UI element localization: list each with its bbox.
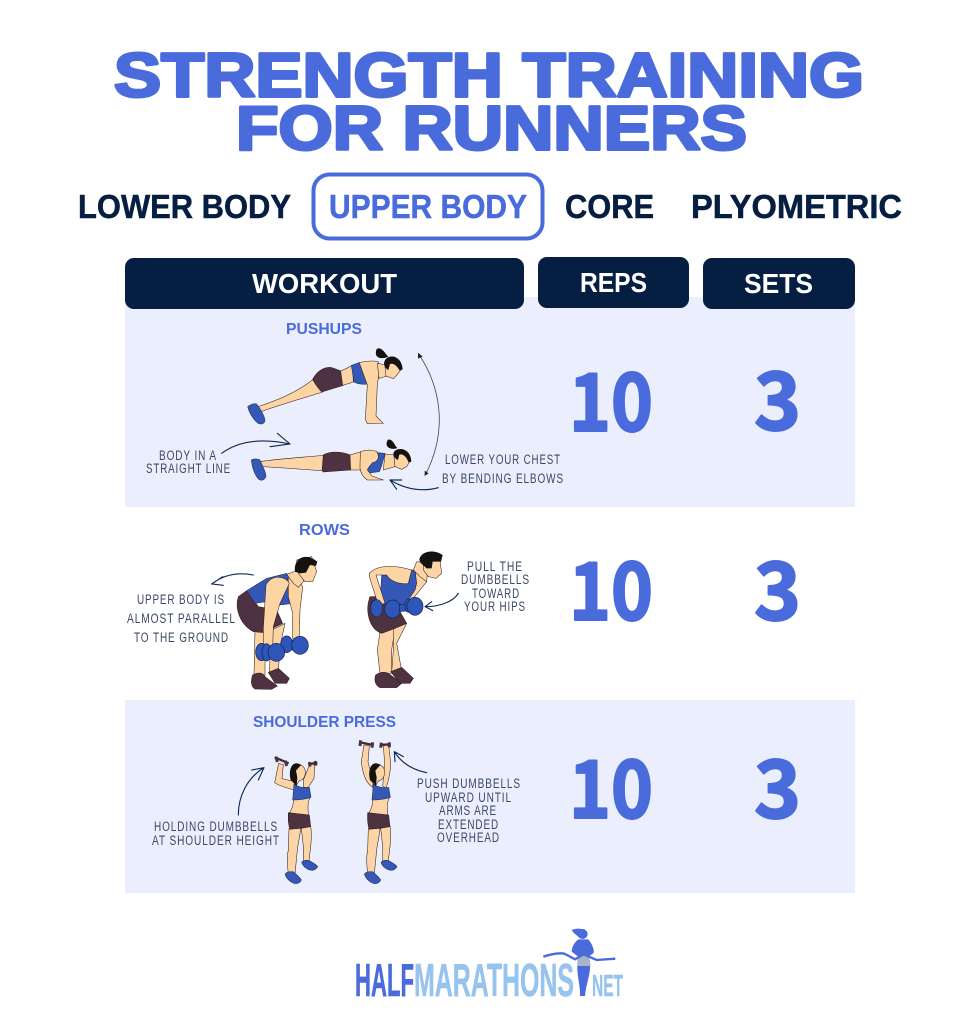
title: FOR RUNNERS	[236, 94, 747, 164]
callout: upper body is almost parallel: ALMOST PARALLEL	[127, 611, 236, 626]
callout: push dumbbells: PUSH DUMBBELLS	[417, 776, 521, 791]
logo text: net: NET	[592, 968, 623, 1003]
arrow: push upward	[394, 752, 427, 773]
illustration: pushups	[248, 348, 411, 480]
panel: shoulder press	[152, 714, 801, 884]
title: STRENGTH TRAINING	[114, 42, 864, 110]
callout: push dumbbells: ARMS ARE	[439, 803, 497, 818]
callout: body in a straight line	[146, 448, 231, 476]
reps value: pushups: 10	[569, 339, 653, 455]
logo: halfmarathons.net: HALF	[355, 954, 414, 1006]
callout: push dumbbells: UPWARD UNTIL	[425, 790, 512, 805]
callout: push dumbbells	[417, 776, 521, 845]
logo: halfmarathons.net	[355, 929, 623, 1006]
sets value: rows: 3	[754, 528, 801, 644]
heading: rows: ROWS	[299, 522, 350, 539]
callout: pull the dumbbells: YOUR HIPS	[464, 599, 526, 614]
callout: lower your chest: BY BENDING ELBOWS	[442, 471, 564, 486]
callout: holding dumbbells: AT SHOULDER HEIGHT	[152, 833, 280, 848]
illustration: shoulder press	[275, 740, 397, 884]
arrow: pull toward hips	[425, 593, 458, 611]
tab: upper body: UPPER BODY	[329, 188, 527, 225]
table header: workout	[125, 258, 524, 309]
callout: upper body is almost parallel	[127, 592, 236, 645]
arrow: shoulder height	[238, 768, 264, 815]
reps value: shoulder press: 10	[569, 726, 653, 842]
panel: pushups row background	[125, 297, 855, 507]
sets value: pushups: 3	[754, 338, 801, 454]
callout: upper body is almost parallel: TO THE GROUND	[134, 630, 229, 645]
title	[114, 42, 864, 164]
logo icon: runner with finish tape	[543, 929, 615, 996]
callout: pull the dumbbells	[461, 559, 530, 614]
panel: pushups	[146, 321, 801, 490]
reps value: rows: 10	[569, 528, 653, 644]
table header: reps: REPS	[580, 267, 647, 298]
callout: pull the dumbbells: TOWARD	[472, 586, 520, 601]
callout: push dumbbells: EXTENDED	[438, 817, 499, 832]
callout: body in a straight line: BODY IN A	[159, 448, 217, 463]
arrow: lower your chest	[390, 480, 438, 490]
tab: plyometric: PLYOMETRIC	[691, 188, 902, 225]
illustration: rows, dumbbells at the floor	[237, 557, 317, 689]
tab: core: CORE	[565, 188, 654, 225]
table header: sets: SETS	[744, 268, 813, 299]
table header: workout: WORKOUT	[252, 268, 397, 299]
logo text: marathons: MARATHONS	[414, 954, 574, 1006]
panel: shoulder press row background	[125, 700, 855, 893]
table header: reps	[538, 257, 689, 308]
heading: pushups: PUSHUPS	[286, 321, 362, 338]
callout: holding dumbbells	[152, 819, 280, 848]
tab: lower body: LOWER BODY	[78, 188, 291, 225]
sets value: shoulder press: 3	[754, 726, 801, 842]
callout: upper body is almost parallel: UPPER BODY IS	[137, 592, 225, 607]
callout: lower your chest: LOWER YOUR CHEST	[445, 452, 561, 467]
table header: sets	[703, 258, 855, 309]
callout: lower your chest	[442, 452, 564, 486]
tab: upper body active outline	[314, 174, 542, 238]
category navigation	[78, 174, 902, 238]
arrow: upper body parallel	[212, 574, 253, 585]
callout: holding dumbbells: HOLDING DUMBBELLS	[154, 819, 278, 834]
heading: shoulder press: SHOULDER PRESS	[253, 714, 396, 731]
arrow: body in a straight line	[222, 433, 290, 453]
callout: pull the dumbbells: PULL THE	[467, 559, 523, 574]
panel: rows	[127, 522, 801, 689]
callout: body in a straight line: STRAIGHT LINE	[146, 461, 231, 476]
callout: pull the dumbbells: DUMBBELLS	[461, 572, 530, 587]
arrow: pushup range of motion	[418, 353, 439, 476]
callout: push dumbbells: OVERHEAD	[437, 830, 500, 845]
illustration: rows, dumbbells at the hips	[368, 551, 443, 688]
